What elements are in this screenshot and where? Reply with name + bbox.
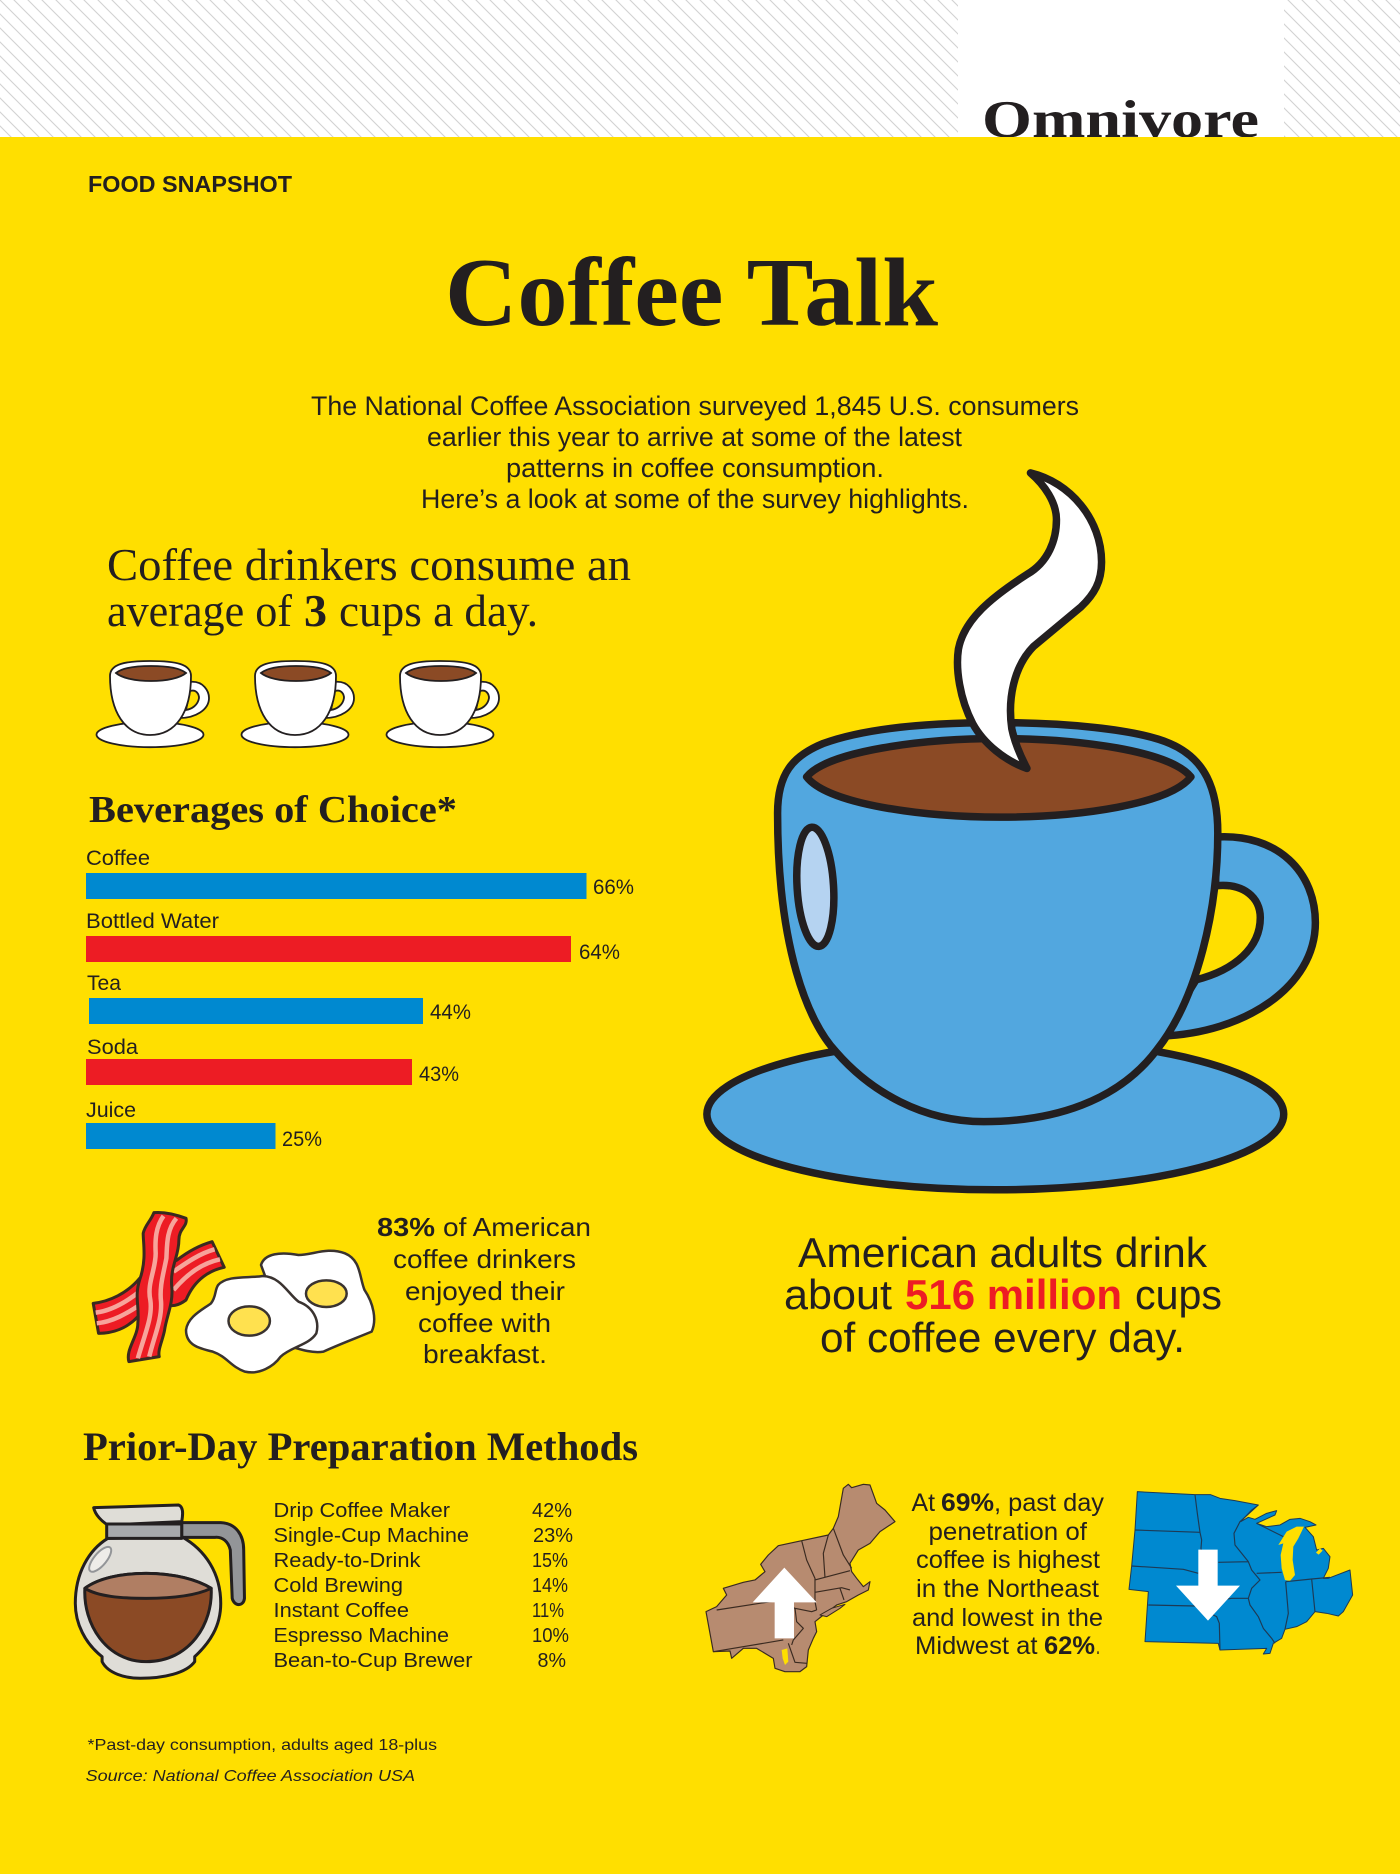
callout: 516 million cups	[784, 1229, 1222, 1361]
bar: coffee 66%	[86, 847, 634, 899]
arrow down	[1176, 1550, 1240, 1621]
icon: bacon and eggs	[93, 1212, 374, 1372]
text block: northeast and midwest: , past day	[994, 1489, 1104, 1517]
map: midwest with down arrow	[1129, 1492, 1353, 1654]
egg front	[186, 1276, 317, 1372]
headline: cups a day: average of	[107, 586, 292, 636]
table: preparation methods: Espresso Machine	[274, 1624, 449, 1647]
headline: cups a day: 3	[304, 586, 327, 636]
text block: 83% with breakfast: enjoyed their	[405, 1276, 565, 1306]
kicker: food snapshot: FOOD SNAPSHOT	[88, 171, 292, 197]
heading: beverages of choice: Beverages of Choice*	[89, 789, 457, 831]
saucer	[707, 1039, 1284, 1190]
section name: Omnivore: Omnivore	[982, 91, 1259, 149]
northeast states	[706, 1484, 895, 1672]
table: preparation methods: 15%	[532, 1549, 568, 1572]
bar: bottled water 64%: 64%	[579, 941, 620, 964]
intro text: Here’s a look at some of the survey highlights.	[421, 484, 969, 514]
bar: juice 25%	[86, 1099, 322, 1151]
intro text	[311, 391, 1079, 514]
table: preparation methods	[274, 1499, 573, 1672]
text block: northeast and midwest: .	[1096, 1632, 1100, 1660]
icon: cup two	[242, 661, 354, 747]
headline: cups a day	[107, 540, 631, 636]
header hatch band	[0, 0, 1400, 138]
text block: 83% with breakfast: breakfast.	[423, 1339, 547, 1369]
headline: cups a day: Coffee drinkers consume an	[107, 540, 631, 590]
table: preparation methods: 23%	[533, 1524, 573, 1547]
table: preparation methods: Bean-to-Cup Brewer	[274, 1649, 473, 1672]
coffee surface	[807, 739, 1191, 817]
bar: coffee 66%: Coffee	[86, 847, 150, 870]
bar: soda 43%	[86, 1036, 459, 1086]
cup body	[778, 723, 1218, 1122]
bacon strip back	[93, 1242, 224, 1333]
bar: juice 25%: 25%	[282, 1128, 322, 1151]
text block: 83% with breakfast: of American	[443, 1212, 591, 1242]
text block: 83% with breakfast: 83%	[377, 1212, 435, 1242]
table: preparation methods: 8%	[538, 1649, 566, 1672]
table: preparation methods: 42%	[532, 1499, 572, 1522]
bar: bottled water 64%	[86, 910, 620, 964]
midwest states	[1129, 1492, 1353, 1654]
icon: cup three	[386, 661, 499, 747]
bar: soda 43%: Soda	[87, 1036, 138, 1059]
heading: prior-day preparation methods: Prior-Day Preparation Methods	[83, 1424, 638, 1469]
text block: northeast and midwest: 62%	[1044, 1632, 1095, 1660]
icon: cup one	[96, 661, 209, 747]
callout: 516 million cups: American adults drink	[798, 1229, 1208, 1276]
callout: 516 million cups: of coffee every day.	[820, 1314, 1185, 1361]
illustration: large blue cup with steam	[707, 473, 1315, 1190]
intro text: earlier this year to arrive at some of the latest	[427, 422, 962, 452]
egg back	[261, 1251, 374, 1352]
bar: tea 44%	[87, 972, 471, 1024]
text block: northeast and midwest: penetration of	[928, 1518, 1087, 1546]
source: Source: National Coffee Association USA	[86, 1768, 415, 1785]
text block: northeast and midwest: in the Northeast	[916, 1575, 1099, 1603]
bar: tea 44%: Tea	[87, 972, 121, 995]
footnote: *Past-day consumption, adults aged 18-plus	[88, 1737, 437, 1754]
callout: 516 million cups: 516 million	[905, 1271, 1122, 1318]
arrow up	[753, 1568, 817, 1638]
handle	[1161, 837, 1315, 1036]
bar: bottled water 64%: Bottled Water	[86, 910, 219, 933]
headline: cups a day: cups a day.	[339, 586, 538, 636]
text block: 83% with breakfast: coffee with	[418, 1308, 551, 1338]
steam	[958, 473, 1102, 768]
icon row: three coffee cups	[96, 661, 499, 747]
callout: 516 million cups: cups	[1135, 1271, 1222, 1318]
title: Coffee Talk	[445, 239, 938, 346]
table: preparation methods: 11%	[532, 1599, 564, 1622]
table: preparation methods: Single-Cup Machine	[274, 1524, 469, 1547]
bar: coffee 66%: 66%	[593, 876, 634, 899]
highlight	[794, 826, 837, 948]
icon: coffee carafe	[75, 1505, 244, 1678]
text block: northeast and midwest: At	[912, 1489, 935, 1517]
bar: soda 43%: 43%	[419, 1063, 459, 1086]
bacon strip front	[128, 1212, 186, 1362]
text block: northeast and midwest: Midwest at	[915, 1632, 1038, 1660]
bar: tea 44%: 44%	[430, 1001, 471, 1024]
text block: northeast and midwest	[912, 1489, 1104, 1660]
table: preparation methods: 10%	[532, 1624, 569, 1647]
map: northeast with up arrow	[706, 1484, 895, 1672]
table: preparation methods: Instant Coffee	[274, 1599, 409, 1622]
intro text: The National Coffee Association surveyed 1,845 U.S. consumers	[311, 391, 1079, 421]
text block: northeast and midwest: 69%	[941, 1489, 994, 1517]
table: preparation methods: Cold Brewing	[274, 1574, 403, 1597]
text block: 83% with breakfast: coffee drinkers	[393, 1244, 576, 1274]
bar: juice 25%: Juice	[86, 1099, 136, 1122]
bar chart: beverages	[86, 847, 634, 1151]
intro text: patterns in coffee consumption.	[506, 453, 884, 483]
text block: northeast and midwest: coffee is highest	[916, 1546, 1100, 1574]
text block: 83% with breakfast	[377, 1212, 591, 1369]
text block: northeast and midwest: and lowest in the	[912, 1604, 1103, 1632]
table: preparation methods: 14%	[532, 1574, 568, 1597]
table: preparation methods: Ready-to-Drink	[274, 1549, 421, 1572]
table: preparation methods: Drip Coffee Maker	[274, 1499, 450, 1522]
callout: 516 million cups: about	[784, 1271, 892, 1318]
